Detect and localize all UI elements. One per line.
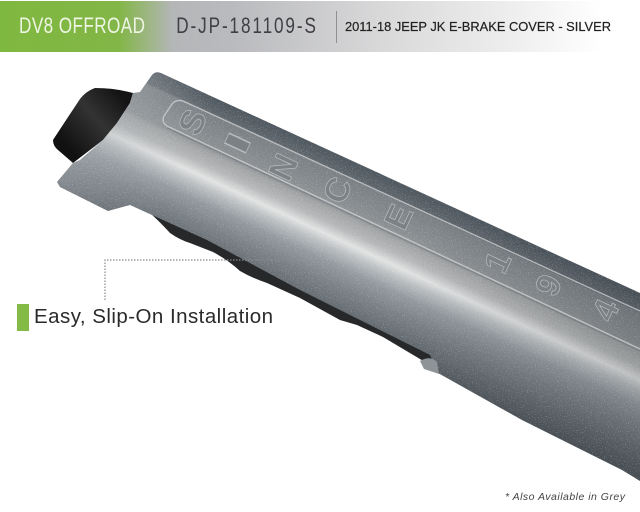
callout: installation: [17, 304, 273, 331]
embossed plate outline: [163, 100, 640, 349]
embossed lettering: [171, 103, 627, 327]
slot notch: [420, 358, 439, 374]
tube shading: [40, 60, 640, 490]
embossed lettering: 9: [528, 269, 570, 302]
embossed lettering: 1: [477, 246, 519, 279]
separator: [336, 11, 337, 43]
embossed lettering: C: [316, 171, 360, 210]
part number: D-JP-181109-S: [176, 14, 316, 39]
embossed lettering: E: [377, 199, 421, 236]
brand name: DV8 OFFROAD: [19, 14, 145, 39]
callout leader line: [105, 260, 296, 300]
embossed lettering: N: [262, 148, 306, 187]
footnote: * Also Available in Grey: [505, 491, 626, 503]
embossed lettering: I: [216, 126, 259, 161]
green marker: [17, 304, 29, 331]
black end cap: [53, 88, 133, 163]
product title: 2011-18 JEEP JK E-BRAKE COVER - SILVER: [345, 19, 611, 34]
embossed lettering: 4: [585, 294, 627, 327]
embossed lettering: S: [171, 103, 215, 141]
product: e-brake cover: [40, 60, 640, 490]
black rubber grip underside: [125, 200, 445, 362]
silver tube body: [57, 72, 640, 481]
header band: [0, 1, 640, 52]
callout text: Easy, Slip-On Installation: [34, 305, 273, 328]
